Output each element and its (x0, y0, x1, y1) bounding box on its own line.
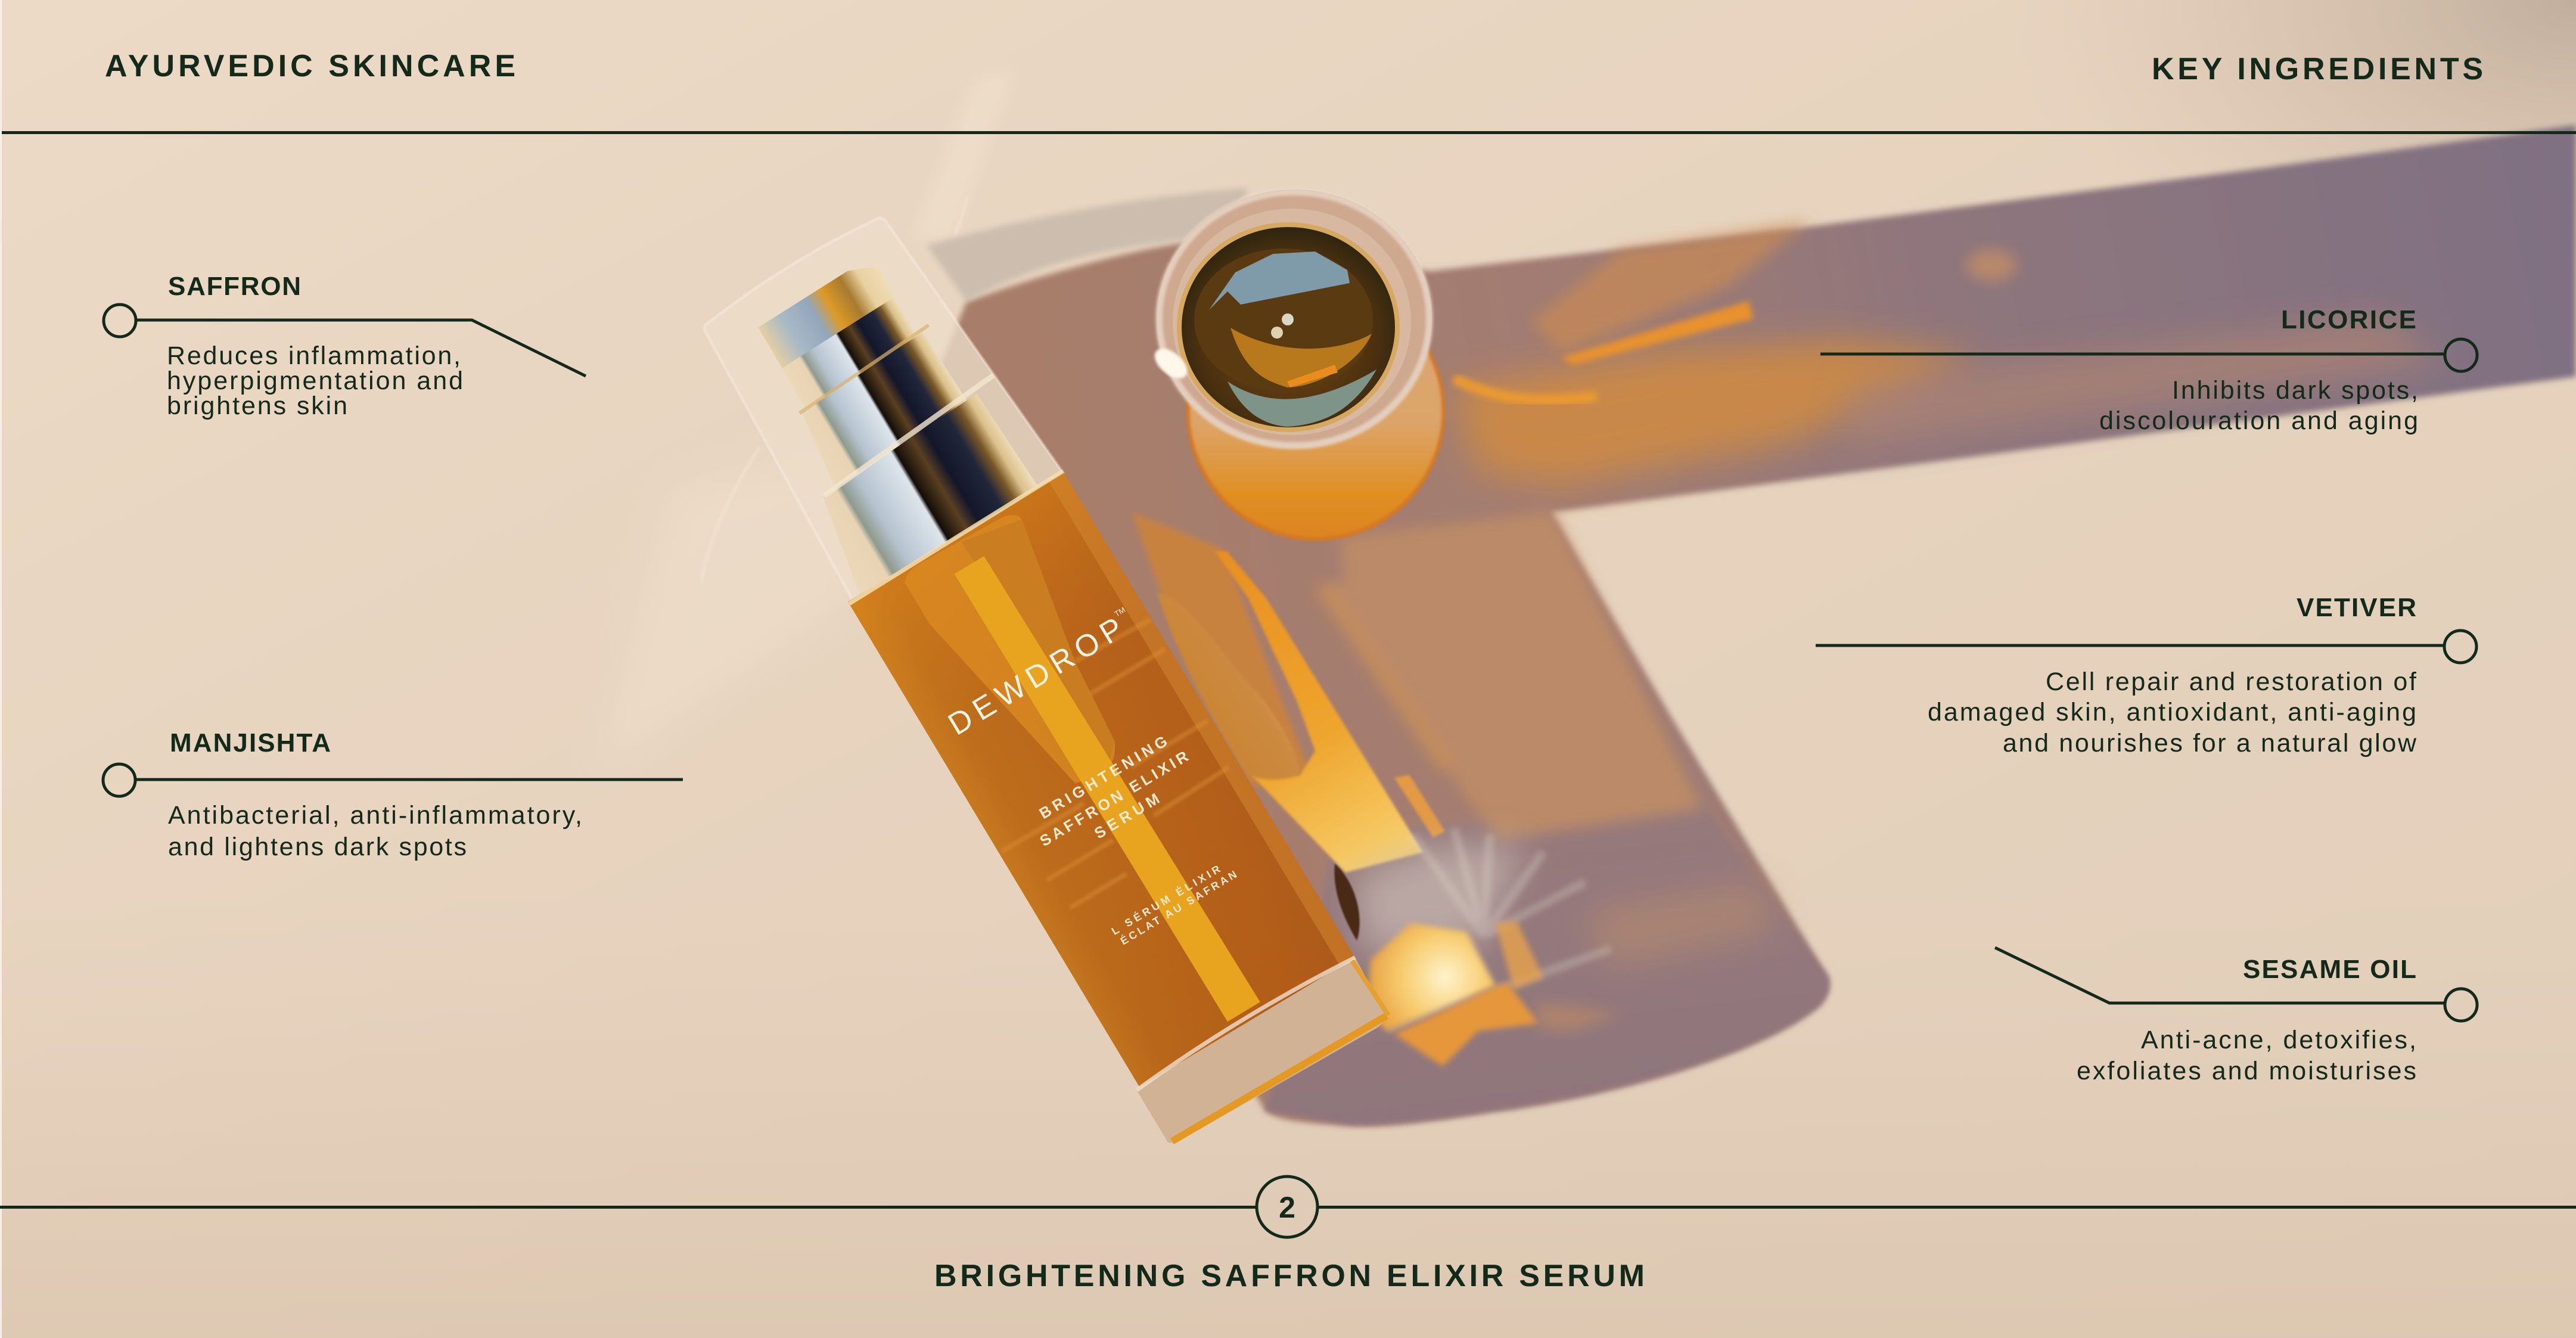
callout: licorice (1820, 305, 2477, 435)
footer title: BRIGHTENING SAFFRON ELIXIR SERUM (934, 1259, 1645, 1293)
callout: sesame oil: exfoliates and moisturises (2077, 1057, 2416, 1085)
bottle label: SERUM (1091, 790, 1163, 842)
cap shadow arc (927, 188, 1248, 302)
callout: licorice: LICORICE (2281, 305, 2416, 334)
callout: sesame oil: SESAME OIL (2243, 955, 2416, 984)
callout: licorice: Inhibits dark spots, (2172, 376, 2418, 405)
footer rule right (1318, 1206, 2576, 1209)
jar gold lens (1179, 225, 1397, 430)
bottle label: L SÉRUM ÉLIXIR (1109, 862, 1222, 937)
cast shadow of bottle and jar (894, 125, 2576, 1126)
callout: vetiver: Cell repair and restoration of (2046, 668, 2417, 696)
bottle clear cap (688, 200, 1064, 600)
callout: saffron: SAFFRON (168, 272, 301, 301)
callout: licorice: discolouration and aging (2099, 406, 2418, 435)
bottle label: BRIGHTENING (1036, 732, 1170, 822)
bottle streaks (937, 617, 1257, 923)
callout: manjishta (103, 728, 683, 861)
callout: saffron: Reduces inflammation, (167, 342, 461, 370)
page number badge: 2 (1279, 1191, 1295, 1224)
footer rule (0, 1206, 1256, 1209)
bottle label (942, 604, 1274, 966)
bottle serum (848, 472, 1355, 1087)
header rule (2, 131, 2576, 134)
bottle label: ÉCLAT AU SAFRAN (1118, 868, 1239, 947)
bottle silver pump (714, 234, 1055, 595)
bottle edge droplet (1334, 864, 1360, 940)
header left: AYURVEDIC SKINCARE: AYURVEDIC SKINCARE (105, 49, 515, 83)
bottle (680, 200, 1392, 1151)
callout: saffron: brightens skin (167, 392, 347, 420)
callout: manjishta: Antibacterial, anti-inflammatory, (168, 801, 582, 830)
refracted light in shadow (1132, 221, 2443, 1066)
jar glare (1149, 343, 1192, 384)
bottle label: DEWDROP (942, 611, 1129, 742)
jar body with serum (1188, 284, 1443, 539)
callout: vetiver: and nourishes for a natural glow (2003, 729, 2417, 758)
callout: vetiver: VETIVER (2297, 593, 2416, 622)
callout: sesame oil (1995, 948, 2477, 1085)
jar (1149, 190, 1443, 539)
bottle dip tube wedge (900, 507, 1155, 810)
callout: vetiver (1816, 593, 2476, 758)
header right: KEY INGREDIENTS: KEY INGREDIENTS (2152, 52, 2483, 86)
callout: sesame oil: Anti-acne, detoxifies, (2141, 1026, 2416, 1054)
bottle label: SAFFRON ELIXIR (1037, 747, 1191, 850)
bottle dip tube (955, 552, 1260, 1023)
page number badge (1257, 1176, 1317, 1237)
callout: vetiver: damaged skin, antioxidant, anti-aging (1928, 698, 2416, 727)
bottle label: TM (1113, 605, 1127, 619)
jar lid rim (1157, 190, 1432, 448)
callout: manjishta: and lightens dark spots (168, 833, 467, 861)
callout: saffron: hyperpigmentation and (167, 367, 463, 395)
callout: manjishta: MANJISHTA (170, 728, 331, 758)
bottle glass base (1136, 958, 1392, 1151)
shadow spot: upper band light patch (1966, 250, 2016, 281)
callout: saffron (104, 272, 586, 420)
